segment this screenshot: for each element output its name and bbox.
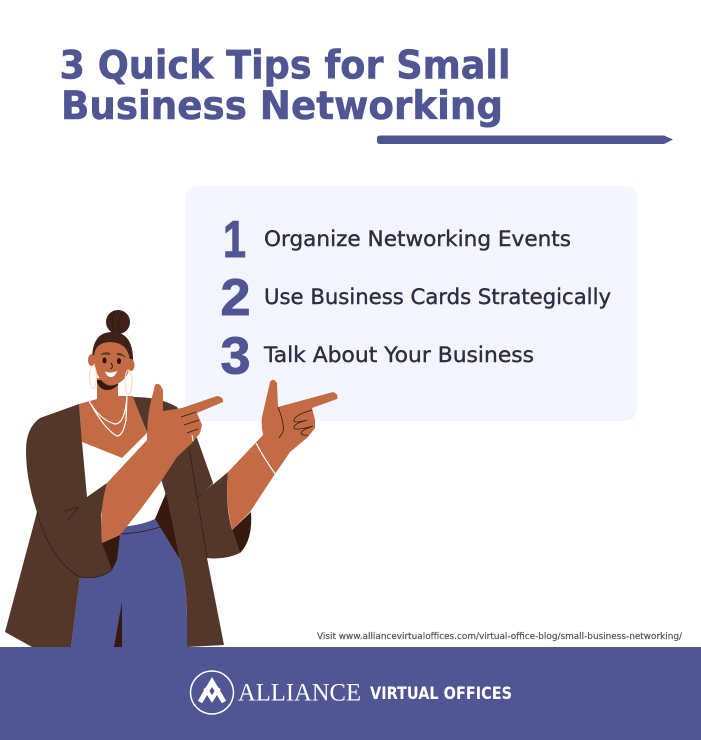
illustration: woman pointing <box>5 310 338 647</box>
hair <box>92 332 133 363</box>
necklace <box>89 396 127 436</box>
hair bun <box>106 310 130 334</box>
logo <box>190 671 512 714</box>
tip 1: 1 <box>223 211 246 269</box>
logo: VIRTUAL OFFICES <box>370 684 512 703</box>
tip 1 <box>223 211 571 269</box>
logo emblem <box>190 671 234 714</box>
jacket left <box>5 404 120 647</box>
tip 3: 3 <box>220 328 250 386</box>
left arm and pointing hand <box>101 384 223 543</box>
face <box>88 342 134 386</box>
title <box>60 44 510 129</box>
neck and chest <box>79 378 147 458</box>
logo wordmark: ALLIANCE <box>238 678 361 706</box>
source url: Visit www.alliancevirtualoffices.com/virtual-office-blog/small-business-networking/ <box>317 632 683 642</box>
tip 3 <box>220 328 534 386</box>
right arm and pointing hand <box>227 380 338 530</box>
trousers <box>71 519 187 647</box>
title: 3 Quick Tips for Small <box>60 44 510 88</box>
tip 2: 2 <box>220 269 250 327</box>
tip 3: Talk About Your Business <box>263 343 534 367</box>
title: Business Networking <box>61 84 503 129</box>
tip 2 <box>220 269 611 327</box>
tip 1: Organize Networking Events <box>264 227 571 251</box>
neck shadow <box>97 380 118 390</box>
jacket right <box>133 397 224 647</box>
footer band <box>0 647 701 740</box>
panel: tips <box>185 186 637 421</box>
tip 2: Use Business Cards Strategically <box>264 285 611 309</box>
title underline arrow <box>377 136 673 144</box>
white top <box>82 433 165 527</box>
earrings <box>90 366 132 394</box>
